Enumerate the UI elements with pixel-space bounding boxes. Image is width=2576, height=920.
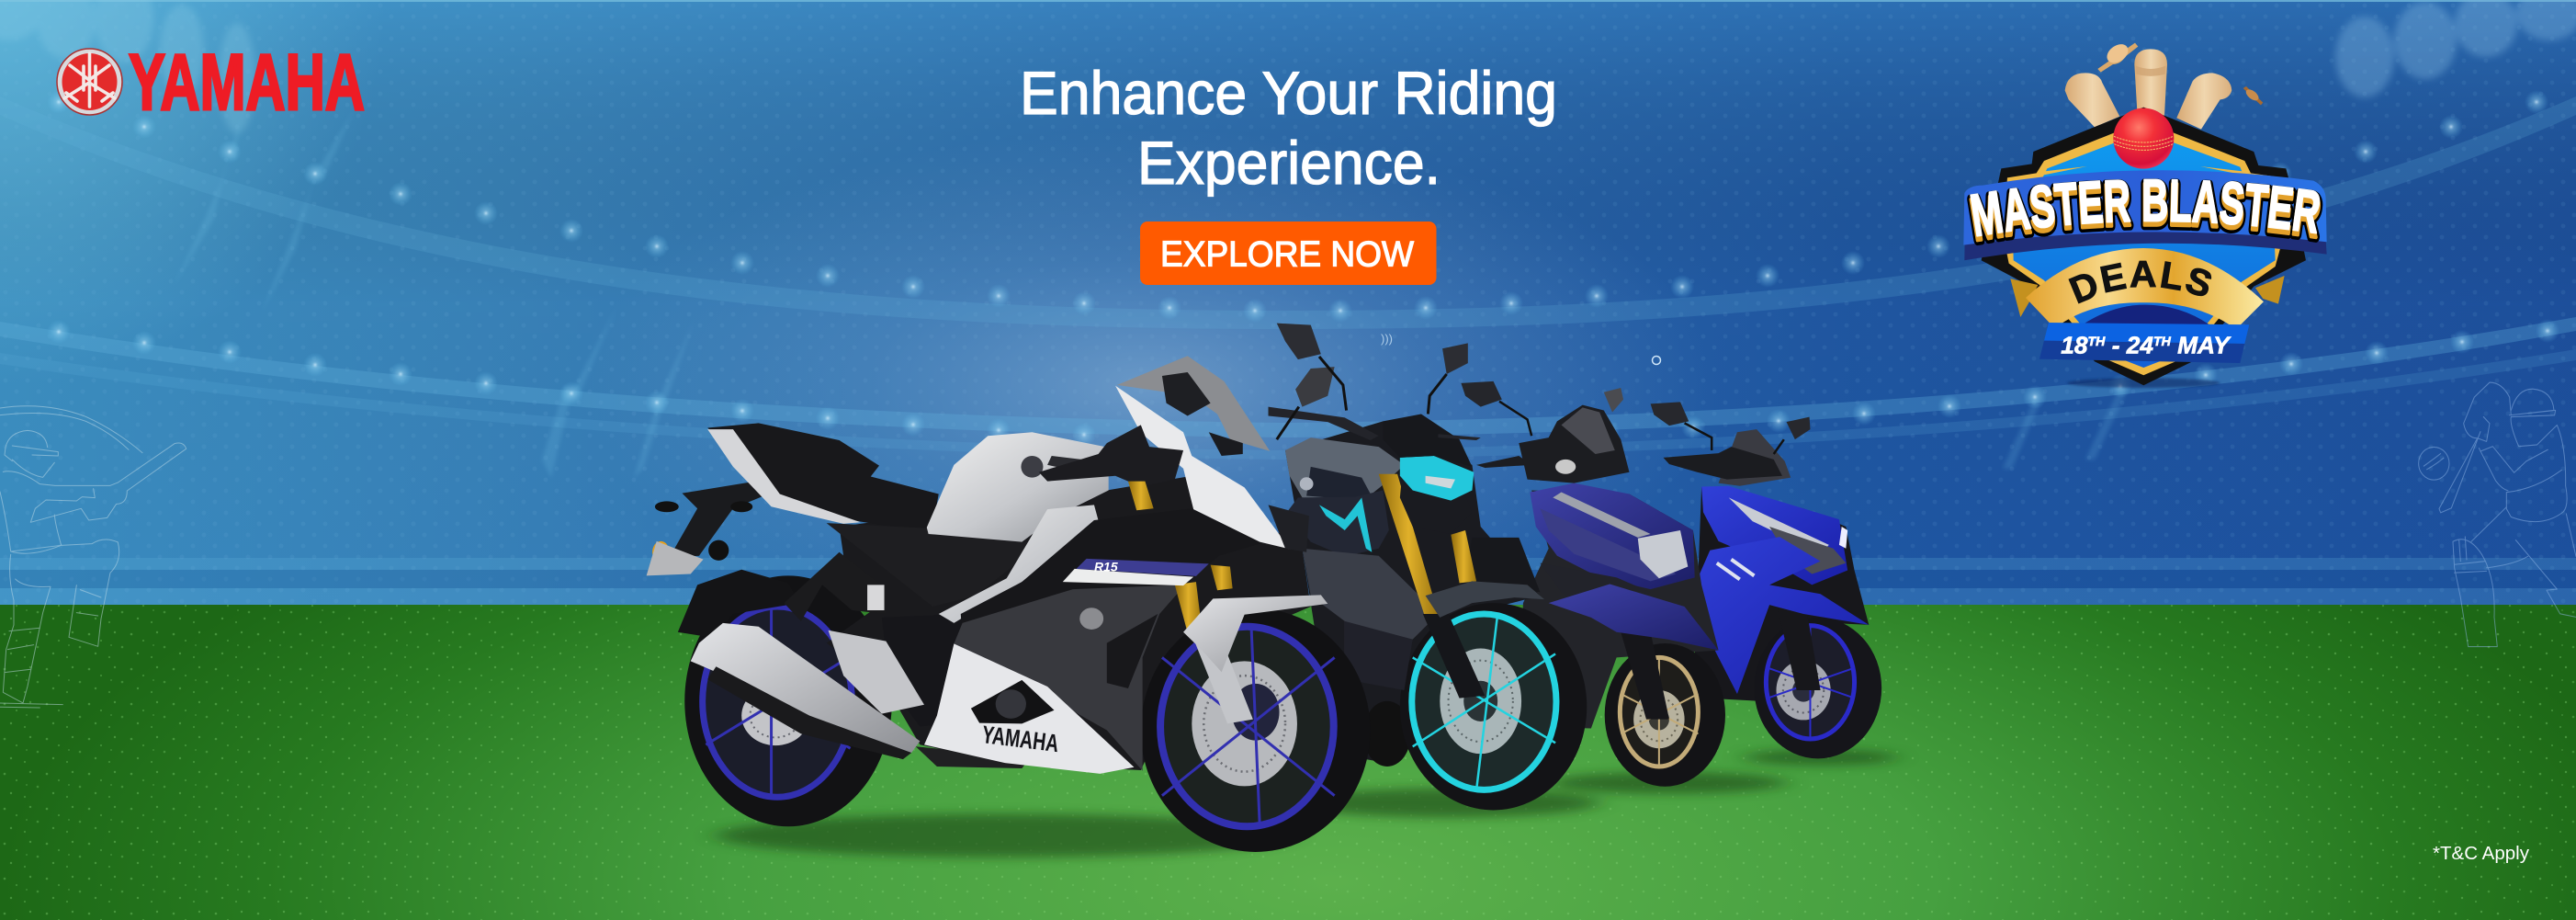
- R15 badge: [1063, 559, 1209, 585]
- tail panel: [707, 429, 861, 524]
- windscreen: [1117, 356, 1270, 451]
- heading: Enhance Your Riding: [1020, 59, 1557, 127]
- belly wordmark: YAMAHA: [980, 721, 1060, 757]
- terms note: *T&C Apply: [2433, 843, 2530, 864]
- engine: [882, 614, 963, 727]
- stadium arcs: [0, 97, 2576, 605]
- exhaust: [691, 623, 920, 753]
- ribbon: deals: [2026, 248, 2264, 325]
- date banner: MAY: [2171, 332, 2231, 359]
- silhouette base: [827, 476, 1311, 770]
- front wheel: [1400, 603, 1587, 810]
- rear shock: [867, 585, 885, 610]
- motorcycle: cyan naked bike: [1269, 324, 1587, 810]
- icon: three stumps: [2065, 49, 2231, 130]
- tank: [927, 432, 1109, 542]
- stadium lights: ))): [1381, 332, 1393, 346]
- date banner: 18: [2061, 332, 2087, 359]
- illustration: left batsman outline: [0, 406, 186, 708]
- heading: [1020, 59, 1557, 197]
- icon: flying bails: [2097, 40, 2263, 105]
- gold forks: [1128, 482, 1154, 510]
- ribbon tails: [2010, 276, 2285, 317]
- ground shadows: [716, 749, 1897, 858]
- seat: [707, 423, 939, 528]
- logo: Yamaha: [57, 39, 365, 127]
- date banner: TH: [2153, 334, 2172, 348]
- subframe: [827, 523, 1041, 607]
- background: stadium sky: [0, 0, 2576, 607]
- tail tidy and plate: [647, 480, 777, 575]
- date banner: - 24: [2105, 332, 2153, 359]
- badge: Master Blaster Deals: [1963, 42, 2327, 389]
- front wheel: [1141, 608, 1370, 852]
- handlebar cluster: [1039, 425, 1183, 487]
- motorcycles group: [647, 324, 1897, 858]
- ribbon: deals: DEALS: [2069, 261, 2212, 303]
- side silver fairing: [939, 505, 1100, 623]
- R15 badge: R15: [1094, 559, 1118, 574]
- button: explore now: [1140, 221, 1437, 285]
- shield: [1982, 108, 2306, 388]
- rear hugger: [678, 570, 799, 638]
- icon: cricket ball: [2113, 108, 2174, 169]
- front wheel: [1754, 618, 1881, 758]
- motorcycle: blue scooter (far right): [1651, 402, 1881, 758]
- title text: MASTER BLASTER: [1967, 178, 2322, 246]
- rear wheel glimpse: [1363, 701, 1411, 767]
- stadium lights: [47, 90, 2559, 478]
- front fender: [1183, 595, 1328, 672]
- illustration: right batsman outline: [2419, 382, 2576, 647]
- rear wheel: [684, 575, 892, 826]
- nose panel: [1115, 386, 1291, 550]
- heading: Experience.: [1137, 129, 1441, 197]
- title text: MASTER BLASTER: [1970, 178, 2321, 237]
- belly pan: [924, 643, 1134, 774]
- black fairing: [961, 508, 1269, 640]
- date banner: TH: [2088, 334, 2106, 348]
- wordmark: YAMAHA: [129, 39, 365, 127]
- date banner: [2039, 323, 2249, 363]
- motorcycle: R15 superbike: [647, 356, 1370, 852]
- grass field: [0, 605, 2576, 920]
- title plate: [1963, 170, 2327, 260]
- button: explore now: EXPLORE NOW: [1160, 235, 1414, 274]
- front wheel: [1605, 643, 1725, 787]
- lower grey fairing: [954, 585, 1185, 771]
- motorcycle: navy scooter: [1461, 381, 1725, 787]
- icon: tuning-fork emblem: [57, 49, 122, 115]
- title text: MASTER BLASTER: [1970, 182, 2321, 243]
